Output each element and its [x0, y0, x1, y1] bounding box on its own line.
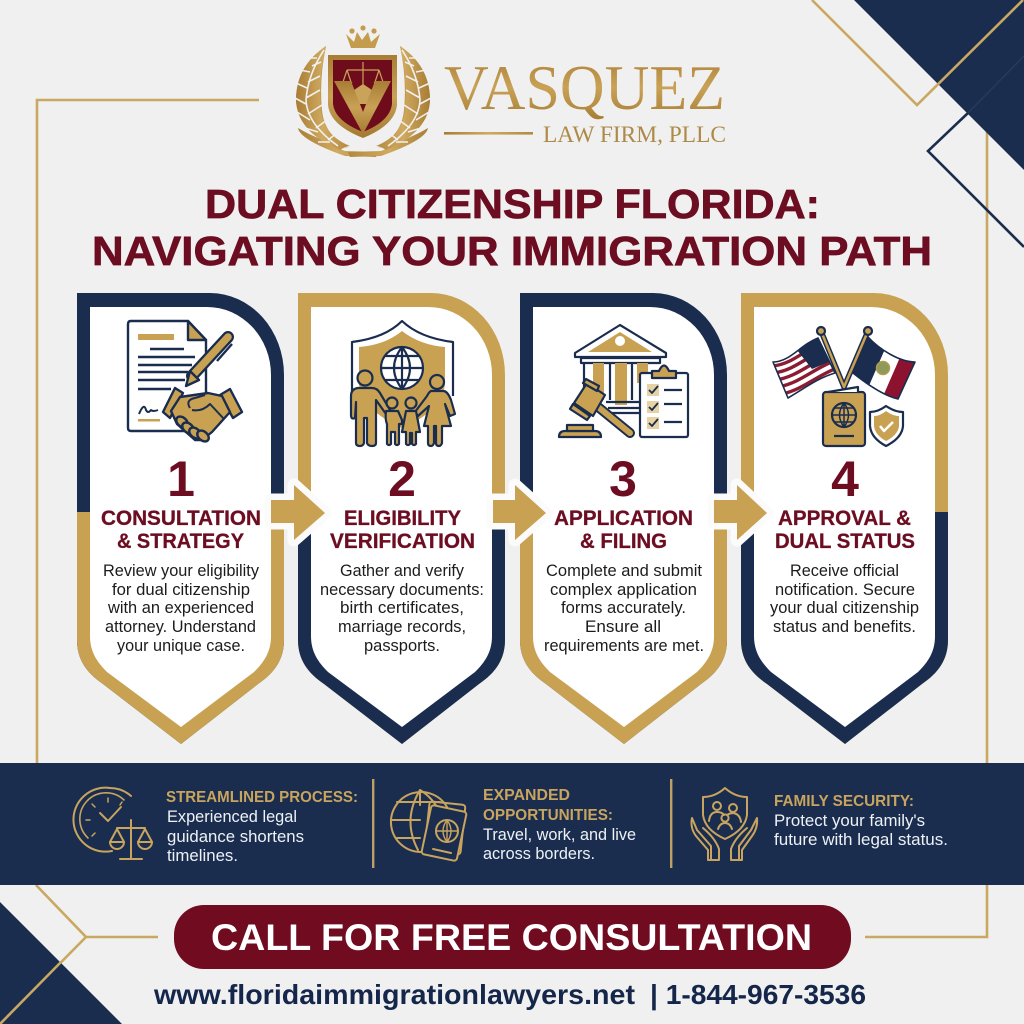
icon: clock and scales — [73, 788, 152, 859]
benefit 2 text: OPPORTUNITIES: — [483, 807, 613, 824]
step 3 description: Ensure all — [585, 617, 661, 636]
logo subtitle: LAW FIRM, PLLC — [543, 122, 726, 147]
benefit 1 text — [166, 789, 358, 865]
panel: step 4 — [741, 293, 948, 744]
step 1 heading: CONSULTATION — [101, 507, 261, 530]
step 3 heading — [554, 507, 693, 553]
step 3 description: requirements are met. — [544, 636, 704, 655]
contact line: | 1-844-967-3536 — [650, 979, 866, 1010]
step 4 heading — [775, 507, 915, 553]
icon: hands and family shield — [692, 788, 757, 860]
step 1 description: attorney. Understand — [105, 617, 256, 636]
panel: step 3 — [520, 293, 727, 744]
contact line — [153, 979, 866, 1010]
logo — [295, 25, 431, 157]
title: NAVIGATING YOUR IMMIGRATION PATH — [92, 228, 932, 274]
number 3: 3 — [609, 451, 637, 507]
benefit 1 text: guidance shortens — [167, 827, 304, 846]
step 1 description: for dual citizenship — [112, 580, 250, 599]
step 2 description: passports. — [364, 636, 440, 655]
step 3 heading: APPLICATION — [554, 507, 693, 530]
benefit 3 text — [774, 793, 948, 849]
step 1 description: your unique case. — [117, 636, 245, 655]
step 1 description: Review your eligibility — [103, 561, 260, 580]
step 3 description — [544, 561, 704, 655]
benefit 2 text: Travel, work, and live — [483, 825, 636, 844]
number 2: 2 — [388, 451, 416, 507]
step 4 description: Receive official — [790, 561, 899, 580]
step 4 description: status and benefits. — [773, 617, 916, 636]
title — [92, 181, 932, 274]
logo name: VASQUEZ — [444, 52, 725, 123]
step 4 heading: DUAL STATUS — [775, 530, 915, 553]
benefit 1 text: STREAMLINED PROCESS: — [166, 789, 358, 806]
step 2 heading: VERIFICATION — [330, 530, 475, 553]
arrow: step 3 to 4 — [714, 485, 767, 540]
logo shield — [328, 55, 397, 138]
step 1 description: with an experienced — [107, 598, 254, 617]
step 4 description: notification. Secure — [775, 580, 915, 599]
step 4 description — [770, 561, 919, 636]
icon: document and handshake — [128, 321, 242, 444]
top right corner decoration — [812, 0, 1024, 247]
step 4 heading: APPROVAL & — [778, 507, 911, 530]
step 3 heading: & FILING — [580, 530, 667, 553]
step 2 description: marriage records, — [338, 617, 466, 636]
panel: benefits band — [0, 763, 1024, 885]
logo crown — [346, 25, 380, 48]
step 3 description: Complete and submit — [546, 561, 702, 580]
step 2 description: necessary documents: — [320, 580, 484, 599]
arrow: step 1 to 2 — [271, 485, 325, 540]
logo wreath — [295, 46, 431, 157]
icon: courthouse gavel checklist — [559, 325, 688, 437]
call to action button: CALL FOR FREE CONSULTATION — [211, 917, 812, 958]
step 2 heading — [330, 507, 475, 553]
step 1 heading: & STRATEGY — [117, 530, 244, 553]
benefit 1 text: Experienced legal — [167, 807, 297, 826]
panel: step 2 — [298, 293, 505, 744]
panel: step 1 — [77, 293, 284, 744]
number 4: 4 — [831, 451, 859, 507]
call to action button — [174, 905, 851, 969]
step 4 description: your dual citizenship — [770, 598, 919, 617]
icon: family and globe shield — [351, 321, 455, 446]
benefit 2 text: EXPANDED — [483, 787, 570, 804]
step 3 description: complex application — [550, 580, 697, 599]
step 2 description — [320, 561, 484, 655]
step 1 heading — [101, 507, 261, 553]
contact line: www.floridaimmigrationlawyers.net — [153, 979, 635, 1010]
step 2 description: Gather and verify — [340, 561, 465, 580]
step 2 description: birth certificates, — [340, 598, 464, 617]
benefit 3 text: FAMILY SECURITY: — [774, 793, 914, 810]
step 1 description — [103, 561, 260, 655]
benefit 2 text — [483, 787, 636, 863]
title: DUAL CITIZENSHIP FLORIDA: — [205, 181, 820, 227]
icon: globe and passports — [391, 790, 467, 861]
benefit 2 text: across borders. — [483, 844, 595, 863]
step 2 heading: ELIGIBILITY — [344, 507, 461, 530]
icon: flags passport shield — [770, 327, 920, 446]
benefit 1 text: timelines. — [167, 846, 238, 865]
benefit 3 text: future with legal status. — [774, 830, 948, 849]
bottom left corner decoration — [0, 902, 122, 1024]
step 3 description: forms accurately. — [561, 598, 686, 617]
number 1: 1 — [167, 451, 195, 507]
arrow: step 2 to 3 — [493, 485, 546, 540]
benefit 3 text: Protect your family's — [774, 811, 925, 830]
